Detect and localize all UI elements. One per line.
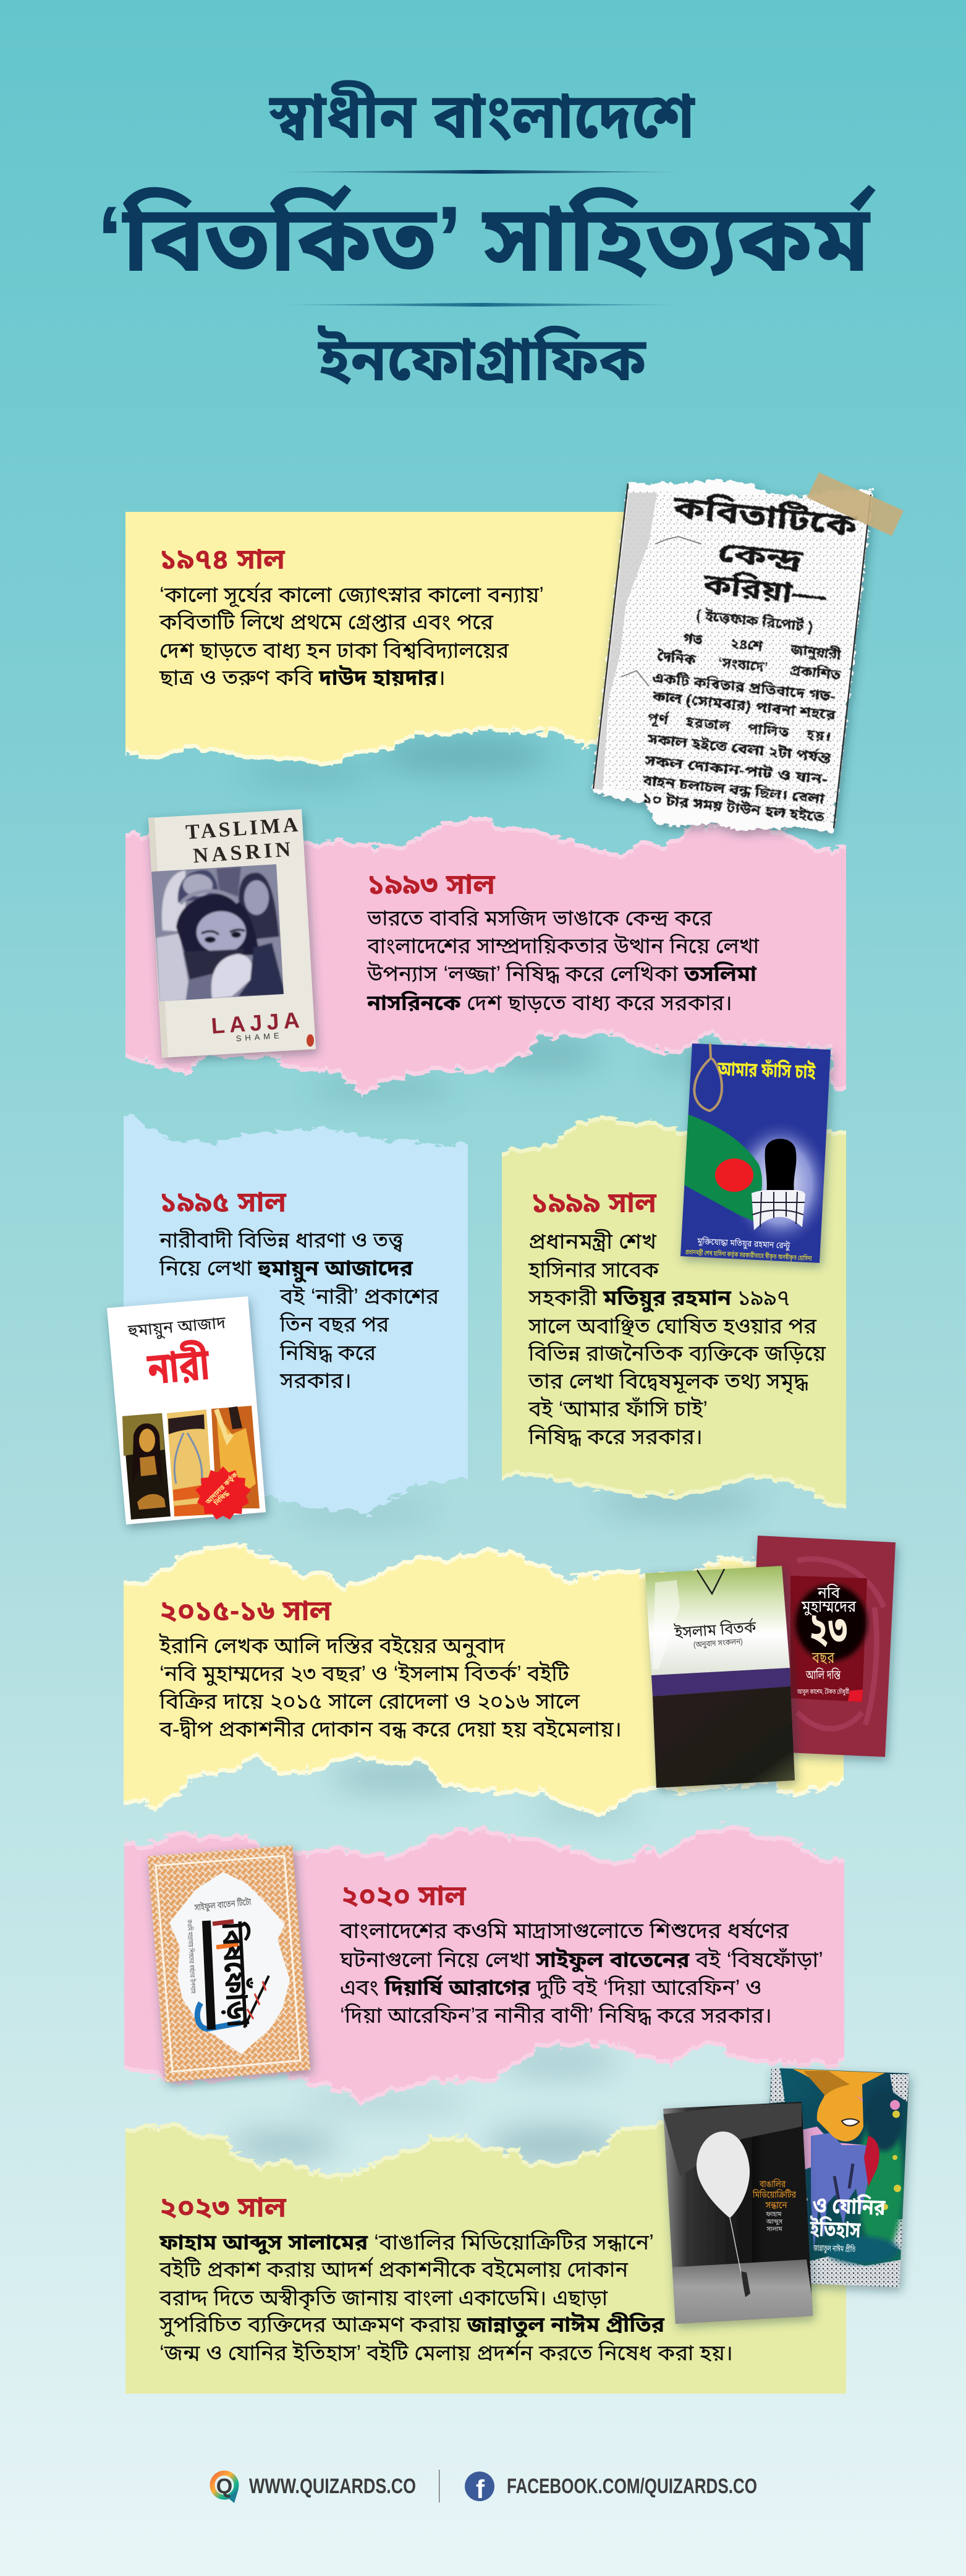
book cover: Mediocrity balloon: আব্দুস [766,2219,783,2225]
body text 1999: বিভিন্ন রাজনৈতিক ব্যক্তিকে জড়িয়ে [528,1341,826,1366]
cover text SHAME: SHAME [235,1031,279,1043]
torn paper background 1974 [125,512,627,767]
website url: WWW.QUIZARDS.CO [249,2475,416,2498]
torn edge shadows 2020 [297,2044,618,2112]
newspaper body text: গত ২৪শে জানুয়ারী [682,629,842,663]
cover author: জান্নাতুল নাঈম প্রীতি [813,2243,856,2255]
body text 1999: সালে অবাঞ্ছিত ঘোষিত হওয়ার পর [528,1314,817,1338]
torn edge shadow 1999 [600,1489,760,1516]
arch panel [169,1872,290,2054]
newspaper body text: কাল (সোমবার) পাবনা শহরে [651,687,837,723]
body text 2015: বিক্রির দায়ে ২০১৫ সালে রোদেলা ও ২০১৬ সালে [159,1689,580,1714]
body text 1993: ভারতে বাবরি মসজিদ ভাঙাকে কেন্দ্র করে [366,906,713,930]
book cover: Mediocrity balloon [663,2102,816,2327]
body text 2015: ‘নবি মুহাম্মদের ২৩ বছর’ ও ‘ইসলাম বিতর্ক’ বইটি [159,1660,570,1686]
torn edge shadows 2023 [229,2127,622,2164]
silhouette figure [765,1139,796,1193]
cover title: আমার ফাঁসি চাই [717,1057,816,1083]
body text 1974: কবিতাটি লিখে প্রথমে গ্রেপ্তার এবং পরে [159,610,494,634]
book cover: Janma o Jonir Itihas [761,2068,909,2290]
newspaper body text: পূর্ণ হরতাল পালিত হয়। [646,708,832,746]
penguin logo [307,1034,314,1047]
cover text: বাঙালির [759,2179,786,2190]
cover text LAJJA: LAJJA [210,1007,300,1039]
speckled paint [800,2256,902,2290]
cover text: নবি [817,1583,840,1602]
newspaper headline: কবিতাটিকে [671,489,860,543]
cover text [752,2179,797,2211]
newspaper body text: ১০ টার সময় টাউন হল হইতে [642,789,826,825]
glow behind figure [727,1119,833,1249]
newspaper body text [642,605,842,825]
panel: 2023 [111,2068,909,2411]
book cover: Islam Bitarka [645,1566,795,1788]
body text 1995: নারীবাদী বিভিন্ন ধারণা ও তত্ত্ব [159,1228,404,1252]
body text 1993: বাংলাদেশের সাম্প্রদায়িকতার উত্থান নিয়ে লেখা [366,933,760,958]
torn edge shadow 2015 [332,1761,643,1820]
torn edge shadows 1974 [241,737,550,781]
body text 1999: হাসিনার সাবেক [528,1257,659,1282]
panel: 1995 [107,1116,482,1524]
cover text: আলি দস্তি [805,1667,841,1682]
torn paper background 2015 [111,1541,856,1816]
torn edge shadow 1995 [290,1505,439,1522]
light wall streak [663,2103,802,2176]
title rule bottom [284,303,678,307]
book title: নারী [145,1338,212,1394]
body text 2015 [159,1633,622,1741]
cover text TASLIMA: TASLIMA [185,814,299,844]
body text 2023: সুপরিচিত ব্যক্তিদের আক্রমণ করায় জান্নাতুল নাঈম প্রীতির [159,2312,665,2338]
newspaper headline: করিয়া— [701,567,828,612]
body text 1974: দেশ ছাড়তে বাধ্য হন ঢাকা বিশ্ববিদ্যালয়ের [159,638,509,663]
book cover: Mediocrity balloon: সালাম [766,2226,782,2233]
book cover: Lajja [148,809,316,1058]
body text 1999: তার লেখা বিদ্বেষমূলক তথ্য সমৃদ্ধ [528,1369,808,1395]
body text 1993 [366,906,760,1015]
panel: 2020 [111,1824,859,2112]
cover text: আবুল কাশেম, টৈকত চৌধুরী [797,1688,850,1696]
heading 1993: ১৯৯৩ সাল [367,868,496,900]
body text 1993: নাসরিনকে দেশ ছাড়তে বাধ্য করে সরকার। [366,990,732,1015]
cover text: মুহাম্মদের [801,1597,856,1615]
inner frame [156,1856,300,2072]
title line 2: ‘বিতর্কিত’ সাহিত্যকর্ম [97,184,876,291]
tape on newspaper [807,472,904,536]
body text 2023: ‘জন্ম ও যোনির ইতিহাস’ বইটি মেলায় প্রদর্শন করতে নিষেধ করা হয়। [159,2340,733,2365]
body text 1974: ‘কালো সূর্যের কালো জ্যোৎস্নার কালো বন্যায়’ [159,582,544,608]
noose rope [694,1044,722,1111]
cover subtitle: প্রধানমন্ত্রী শেখ হাসিনা কর্তৃক সরকারীভাবে স্বীকৃত অনস্বীকৃত হোসিনা [685,1248,813,1263]
newspaper body text: একটি কবিতার প্রতিবাদে গত- [651,669,836,705]
body text 1999: নিষিদ্ধ করে সরকার। [528,1424,703,1449]
footer divider [439,2470,440,2502]
body text 2015: ইরানি লেখক আলি দস্তির বইয়ের অনুবাদ [159,1633,506,1658]
pink and blue drips [802,2127,868,2170]
body text 1995: তিন বছর পর [279,1312,389,1337]
cover art panels [122,1406,260,1520]
author name: হুমায়ুন আজাদ [127,1313,227,1343]
cover text: ২৩ [809,1603,847,1654]
heading 2015: ২০১৫-১৬ সাল [159,1594,332,1626]
facebook icon [465,2472,494,2504]
body text 1995: নিয়ে লেখা হুমায়ুন আজাদের [159,1256,413,1283]
book cover: Amar Fashi Chai [680,1044,833,1263]
shirt [752,1190,805,1230]
cover text [797,1583,856,1696]
colored strokes [213,1921,234,1924]
heading 1995: ১৯৯৫ সাল [159,1186,287,1218]
body text 1995: সরকার। [279,1369,352,1393]
panel: 1974 [111,472,904,833]
book cover: Nari [107,1296,266,1524]
body text 1993: উপন্যাস ‘লজ্জা’ নিষিদ্ধ করে লেখিকা তসলিমা [366,961,757,986]
body text 2020 [339,1918,823,2028]
heading 1999: ১৯৯৯ সাল [531,1186,657,1218]
heading 1974: ১৯৭৪ সাল [159,543,286,575]
newspaper body text: সকল দোকান-পাট ও যান- [643,751,828,788]
small figure [741,2271,750,2297]
cover subtitle: (অনুবাদ সংকলন) [693,1636,743,1650]
newspaper body text: সকাল হইতে বেলা ২টা পর্যন্ত [646,729,832,766]
author: সাইফুল বাতেন টিটো [193,1897,252,1913]
body text 1995: নিষিদ্ধ করে [279,1340,376,1365]
body text 2020: ঘটনাগুলো নিয়ে লেখা সাইফুল বাতেনের বই ‘বিষফোঁড়া’ [339,1947,823,1973]
inverted orange figure [793,2069,885,2141]
cover photo [148,862,287,1005]
title block [97,80,876,393]
red paint [864,2136,879,2187]
quizards logo [213,2473,239,2503]
ground [667,2259,816,2327]
facebook icon: f [476,2475,485,2504]
body text 1999: বই ‘আমার ফাঁসি চাই’ [528,1396,708,1421]
red starburst badge: নিষিদ্ধ [212,1489,231,1508]
title rule top [284,170,678,174]
torn paper background 1999 [488,1115,859,1509]
torn paper background 1995 [111,1116,482,1514]
cover text: বছর [811,1648,834,1667]
newspaper headline: কেন্দ্র [716,535,805,576]
panel: 1999 [488,1044,859,1516]
green paint [858,2111,903,2253]
body text 2020: এবং দিয়ার্ষি আরাগের দুটি বই ‘দিয়া আরেফিন’ ও [340,1975,761,2000]
newspaper body text: বাহন চলাচল বন্ধ ছিল। বেলা [642,772,826,807]
heading 2023: ২০২৩ সাল [159,2191,287,2223]
body text 2015: ব-দ্বীপ প্রকাশনীর দোকান বন্ধ করে দেয়া হয় বইমেলায়। [159,1717,622,1741]
torn edge shadows 1993 [309,1037,723,1098]
title line 1: স্বাধীন বাংলাদেশে [268,80,695,151]
body text 1999: সহকারী মতিয়ুর রহমান ১৯৯৭ [528,1285,790,1312]
flag [680,1113,762,1221]
body text 2023: বরাদ্দ দিতে অস্বীকৃতি জানায় বাংলা একাডেমি। এছাড়া [159,2285,608,2311]
facebook url: FACEBOOK.COM/QUIZARDS.CO [507,2475,757,2498]
cover title line 2: ইতিহাস [809,2216,862,2242]
body text 2023: বইটি প্রকাশ করায় আদর্শ প্রকাশনীকে বইমেলায় দোকান [159,2256,629,2282]
torn paper background 2023 [111,2117,859,2411]
cover text: সন্ধানে [765,2200,787,2211]
scribble [244,1976,269,2028]
cover text: মিডিয়োক্রিটির [752,2190,797,2200]
newspaper body text: ( ইত্তেফাক রিপোর্ট ) [695,605,814,635]
panel: 1993 [111,809,862,1098]
footer [213,2470,757,2504]
book cover: Mediocrity balloon: ফাহাম [765,2211,782,2218]
newspaper body text: দৈনিক ‘সংবাদে’ প্রকাশিত [656,647,842,683]
heading 2020: ২০২০ সাল [341,1879,467,1911]
red starburst badge: আদালত কর্তৃক [203,1470,240,1507]
book cover: Nabi Muhammader 23 Bachhar [747,1536,896,1757]
body text 1974 [159,582,544,690]
newspaper clipping [592,478,873,833]
cover author: মুক্তিযোদ্ধা মতিয়ুর রহমান রেন্টু [697,1236,791,1252]
body text 1974: ছাত্র ও তরুণ কবি দাউদ হায়দার। [159,665,446,690]
balloon [697,2132,750,2218]
cover text NASRIN: NASRIN [192,838,292,867]
body text 2020: বাংলাদেশের কওমি মাদ্রাসাগুলোতে শিশুদের ধর্ষণের [339,1918,789,1943]
newspaper headline [671,489,860,612]
quizards logo: Q [216,2475,232,2498]
body text 1999: প্রধানমন্ত্রী শেখ [528,1229,657,1254]
torn paper background 2020 [111,1824,859,2105]
cover title: ইসলাম বিতর্ক [674,1617,757,1642]
body text 2023: ফাহাম আব্দুস সালামের ‘বাঙালির মিডিয়োক্রিটির সন্ধানে’ [159,2230,654,2256]
body text 1995: বই ‘নারী’ প্রকাশের [279,1284,439,1309]
side note: কওমি মাদ্রাসায় শিশুদের ধর্ষণের উপন্যাস [185,1919,198,1994]
panel: 2015-16 [111,1536,896,1820]
body text 2023 [159,2230,733,2365]
body text 2020: ‘দিয়া আরেফিন’র নানীর বাণী’ নিষিদ্ধ করে সরকার। [340,2003,772,2028]
book cover: Bishfora [148,1845,310,2082]
red starburst badge [195,1466,251,1520]
title line 3: ইনফোগ্রাফিক [317,326,646,393]
torn paper background 1993 [111,817,862,1095]
body text 1995 [159,1228,439,1393]
book title: বিষফোঁড়া [216,1921,256,2028]
body text 1999 [528,1229,826,1449]
paint flecks [882,2111,901,2210]
cover title line 1: জন্ম ও যোনির [773,2191,886,2220]
